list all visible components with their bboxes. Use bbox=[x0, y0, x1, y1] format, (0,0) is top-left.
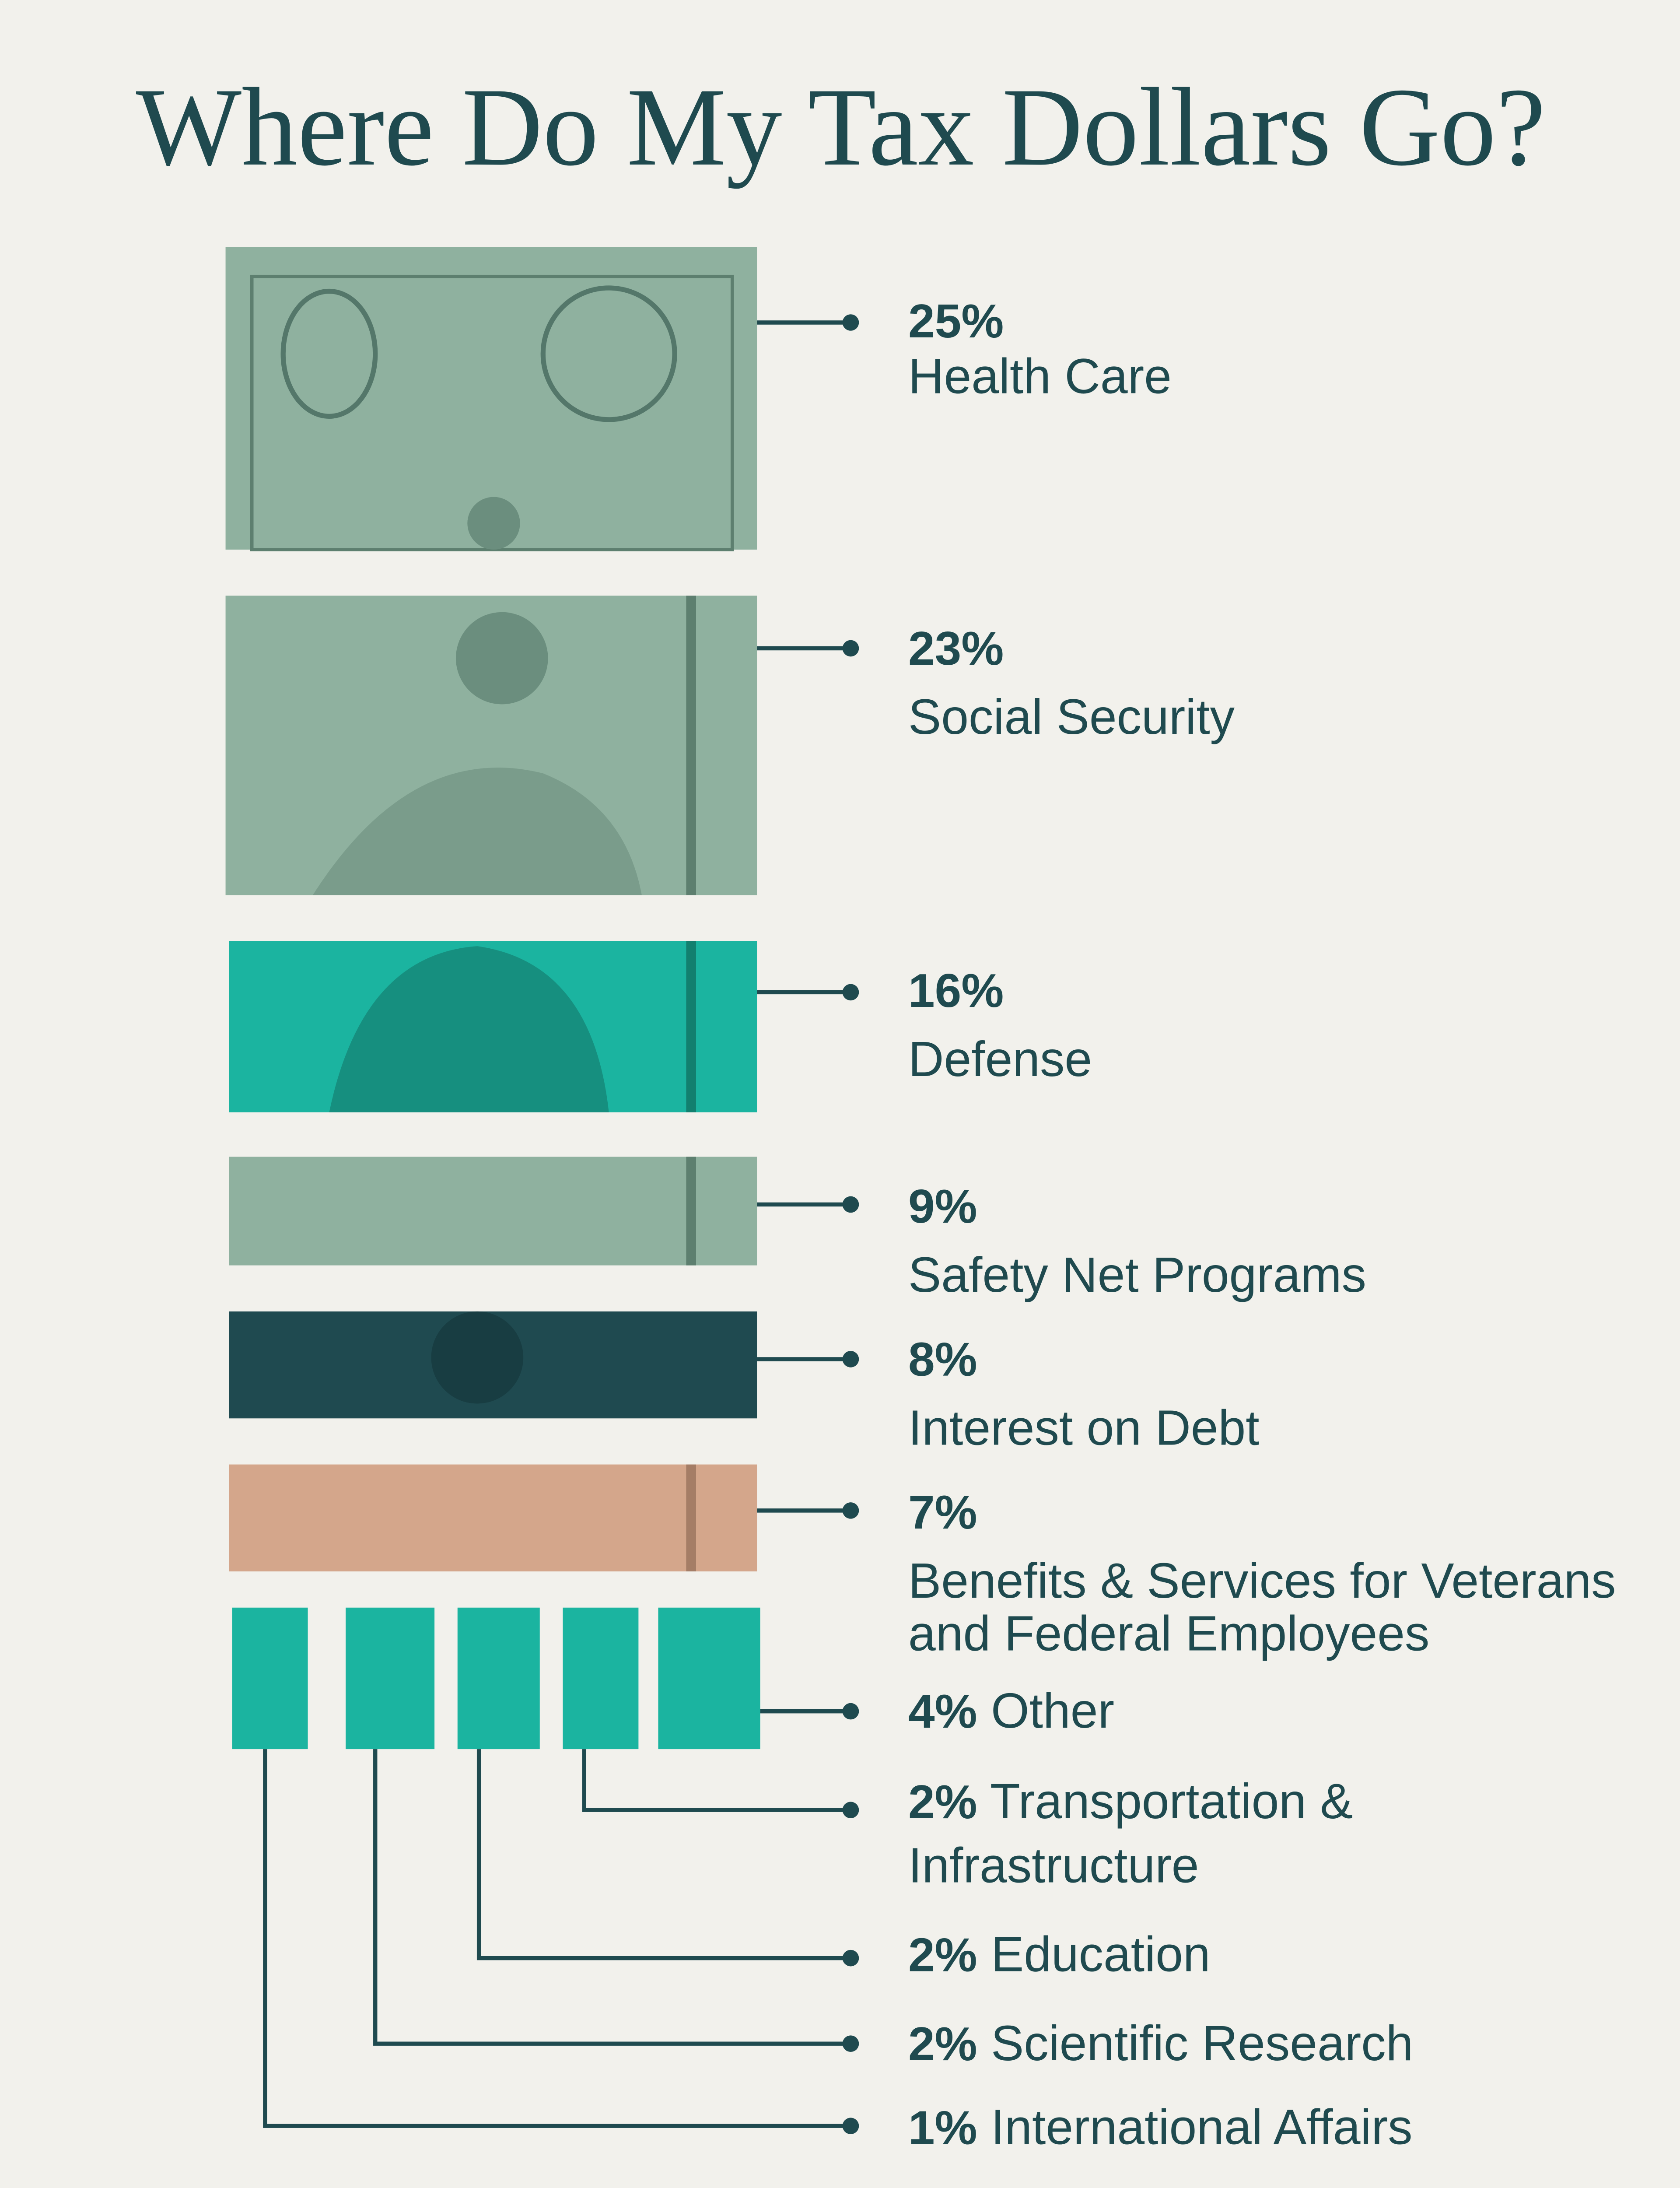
bar: health care bbox=[226, 247, 757, 550]
labels: 16% bbox=[908, 964, 1004, 1017]
labels: 25% bbox=[908, 295, 1004, 348]
labels: 1% International Affairs bbox=[908, 2100, 1413, 2155]
labels: Safety Net Programs bbox=[908, 1247, 1366, 1302]
bar: veterans bbox=[229, 1465, 757, 1571]
labels: Social Security bbox=[908, 689, 1235, 744]
bar: interest on debt bbox=[229, 1311, 757, 1418]
labels bbox=[908, 295, 1616, 2155]
labels: Defense bbox=[908, 1031, 1092, 1087]
labels: Health Care bbox=[908, 349, 1172, 404]
labels: 7% bbox=[908, 1486, 977, 1539]
labels: Interest on Debt bbox=[908, 1400, 1260, 1455]
bar: social security bbox=[226, 596, 757, 895]
labels: 23% bbox=[908, 622, 1004, 675]
connectors bbox=[265, 323, 850, 2126]
labels: 8% bbox=[908, 1333, 977, 1386]
bar: defense bbox=[229, 941, 757, 1112]
labels: 2% Transportation & bbox=[908, 1774, 1353, 1829]
bar: safety net bbox=[229, 1157, 757, 1266]
labels: Infrastructure bbox=[908, 1838, 1199, 1893]
labels: 2% Scientific Research bbox=[908, 2016, 1413, 2071]
labels: 4% Other bbox=[908, 1683, 1114, 1738]
labels: Benefits & Services for Veterans bbox=[908, 1553, 1616, 1608]
small bars bbox=[232, 1608, 760, 1749]
title: Where Do My Tax Dollars Go? bbox=[136, 65, 1546, 189]
labels: 9% bbox=[908, 1180, 977, 1233]
labels: and Federal Employees bbox=[908, 1606, 1429, 1661]
labels: 2% Education bbox=[908, 1927, 1211, 1982]
